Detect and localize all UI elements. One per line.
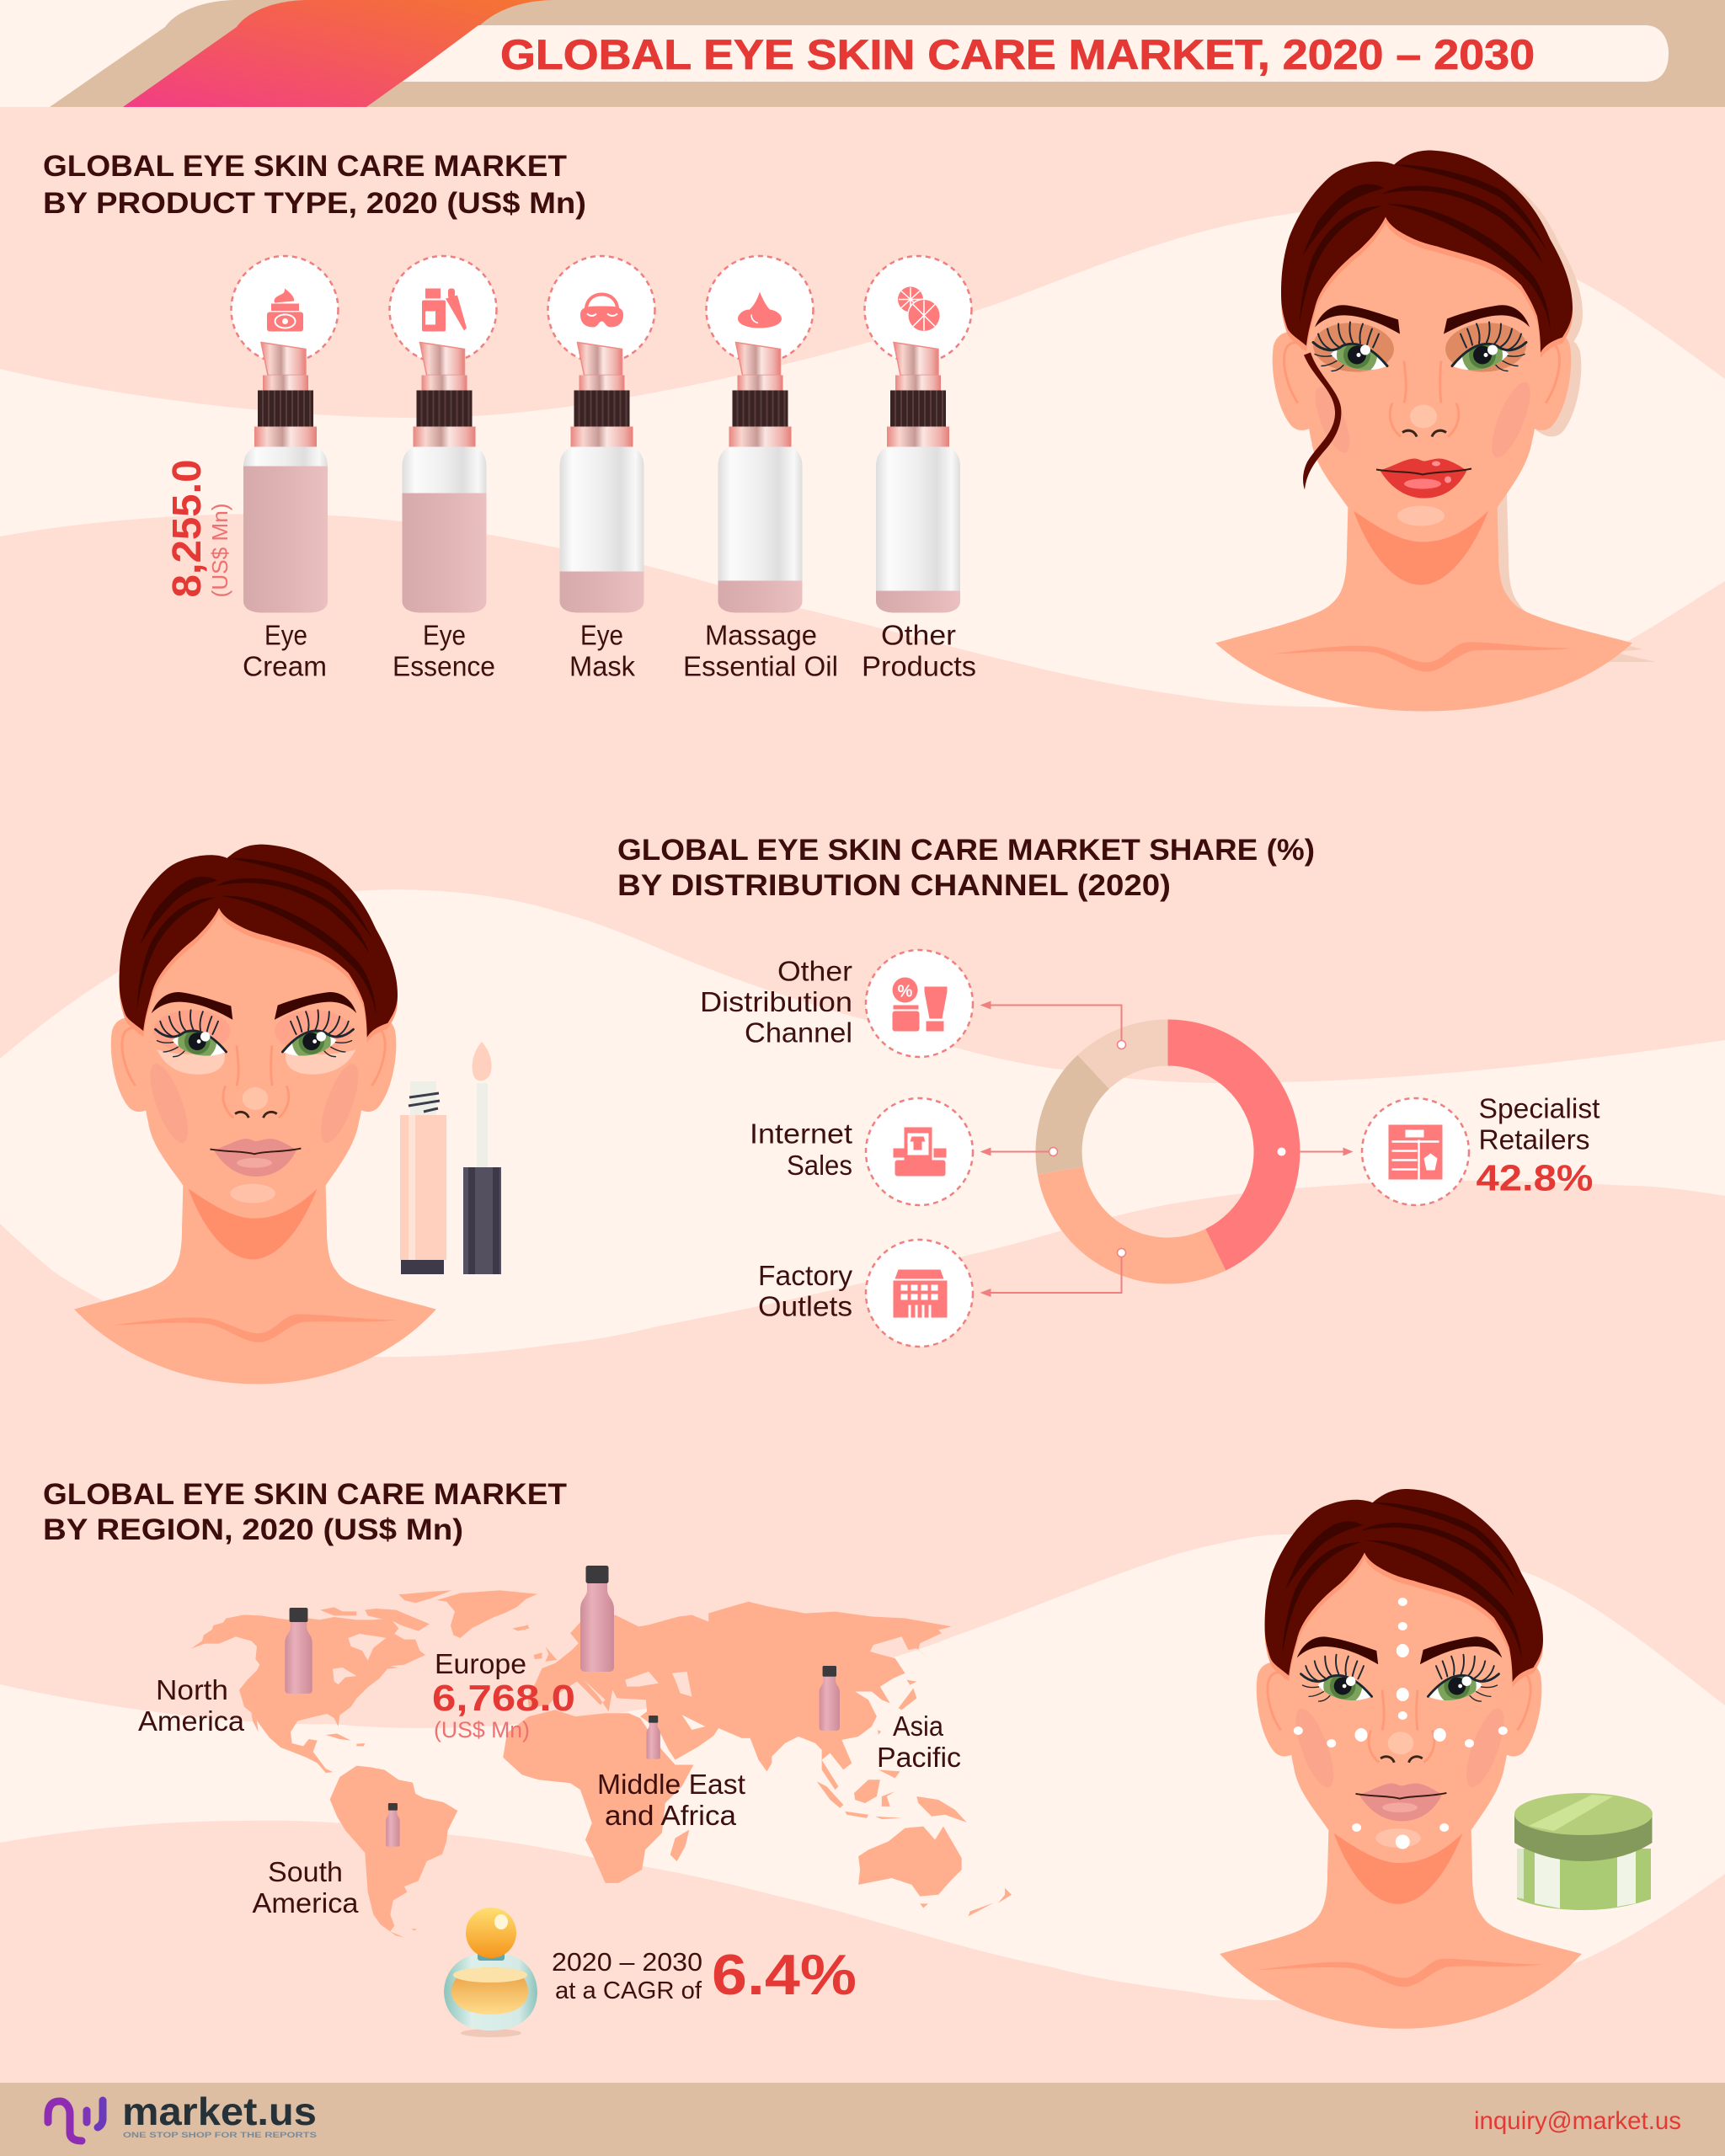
labels: regions	[138, 1648, 961, 1919]
value: eye cream 8,255.0: (US$ Mn)	[207, 504, 232, 598]
labels: product types: Products	[862, 650, 976, 682]
labels: regions: North	[156, 1674, 228, 1705]
value: specialist retailers share: 42.8%	[1476, 1157, 1594, 1199]
logo: market.us	[48, 2089, 317, 2141]
panel: product type bottle chart	[165, 256, 976, 682]
donut: specialist retailers 42.8%	[1167, 1019, 1300, 1271]
contact email: inquiry@market.us	[1474, 2107, 1681, 2135]
leader arrows	[980, 1001, 1353, 1297]
illustration: woman with red lips	[1215, 150, 1656, 711]
illustration: green cream jar	[1514, 1793, 1653, 1910]
labels: regions: 6,768.0	[432, 1678, 575, 1719]
labels: product types: Essential Oil	[683, 650, 838, 682]
bottles on map	[285, 1566, 840, 1847]
heading: by region	[43, 1478, 567, 1546]
labels: regions: America	[253, 1887, 359, 1919]
labels: distribution channels: Other	[777, 955, 852, 987]
icon: massage oil drop	[706, 256, 814, 363]
icon: eye essence	[389, 256, 497, 363]
icon: factory outlets	[866, 1240, 973, 1347]
labels: regions: Asia	[893, 1710, 944, 1742]
labels: regions: Europe	[435, 1648, 526, 1679]
icon: perfume bottle	[444, 1908, 537, 2037]
bottle: middle east and africa	[647, 1716, 660, 1759]
cream dots	[1294, 1598, 1508, 1849]
illustration: woman with under-eye concealer	[74, 845, 436, 1384]
labels: distribution channels	[700, 955, 1600, 1322]
value: eye cream 8,255.0: 8,255.0	[165, 459, 210, 598]
donut: internet sales	[1036, 1055, 1109, 1175]
labels: product types: Mask	[569, 650, 635, 682]
value: eye cream 8,255.0	[165, 460, 232, 598]
labels: regions: (US$ Mn)	[434, 1717, 530, 1742]
heading: by distribution channel: GLOBAL EYE SKIN CARE MARKET SHARE (%)	[617, 834, 1315, 867]
bottle: asia pacific	[820, 1666, 840, 1731]
heading: by product type: GLOBAL EYE SKIN CARE MARKET	[43, 150, 567, 183]
heading: by product type	[43, 150, 586, 220]
donut: other distribution channel	[1077, 1019, 1167, 1089]
bottle: other products	[875, 342, 961, 615]
illustration: woman with cream dots	[1220, 1489, 1582, 2029]
labels: distribution channels: Outlets	[758, 1290, 852, 1322]
labels: product types: Other	[881, 620, 956, 650]
logo wordmark: market.us	[122, 2089, 317, 2133]
labels: distribution channels: Factory	[758, 1260, 852, 1291]
labels: regions: South	[268, 1856, 343, 1887]
heading: by distribution channel: BY DISTRIBUTION CHANNEL (2020)	[617, 869, 1171, 902]
heading: by region: GLOBAL EYE SKIN CARE MARKET	[43, 1478, 567, 1511]
labels: product types: Eye	[580, 620, 623, 650]
icon: other distribution channel: %	[898, 982, 913, 1001]
heading: by distribution channel	[617, 834, 1315, 902]
icon: internet sales	[866, 1098, 973, 1205]
labels: regions: America	[138, 1705, 245, 1737]
illustration: concealer tube and applicator	[400, 1042, 501, 1274]
callout: CAGR 6.4%: 6.4%	[712, 1943, 857, 2007]
labels: distribution channels: Internet	[750, 1118, 852, 1149]
labels: regions: Middle East	[597, 1769, 745, 1800]
labels: regions: and Africa	[605, 1800, 737, 1831]
bottle: eye mask	[559, 342, 645, 615]
bottle: eye cream	[243, 342, 328, 615]
logo mark	[48, 2100, 103, 2141]
bottle: massage essential oil	[718, 342, 804, 615]
bottle: south america	[386, 1803, 400, 1847]
bottle: north america	[285, 1608, 312, 1694]
callout: CAGR 6.4%: at a CAGR of	[555, 1977, 702, 2004]
labels: distribution channels: Channel	[745, 1017, 852, 1048]
icon: specialist retailers	[1362, 1098, 1469, 1205]
bottle: eye essence	[401, 342, 487, 615]
labels: product types: Essence	[393, 650, 495, 682]
world map	[191, 1590, 1012, 1938]
labels: product types: Massage	[705, 620, 817, 650]
labels: product types: Eye	[423, 620, 466, 650]
donut: factory outlets	[1038, 1166, 1226, 1283]
callout: CAGR 6.4%: 2020 – 2030	[552, 1947, 702, 1977]
heading: by region: BY REGION, 2020 (US$ Mn)	[43, 1513, 463, 1546]
labels: distribution channels: Sales	[787, 1150, 852, 1181]
panel: distribution channel donut chart	[700, 950, 1600, 1347]
header band	[0, 0, 1725, 107]
labels: product types: Cream	[243, 650, 327, 682]
labels: distribution channels: Retailers	[1479, 1123, 1590, 1155]
icon: eye cream	[231, 256, 339, 363]
footer band	[0, 2083, 1725, 2156]
bottle: europe	[580, 1566, 614, 1672]
labels: product types	[243, 620, 976, 682]
icon: citrus other products	[864, 256, 972, 363]
labels: product types: Eye	[264, 620, 307, 650]
logo tagline: ONE STOP SHOP FOR THE REPORTS	[123, 2131, 317, 2139]
labels: distribution channels: Distribution	[700, 986, 852, 1017]
heading: by product type: BY PRODUCT TYPE, 2020 (US$ Mn)	[43, 187, 586, 220]
callout: CAGR 6.4%	[552, 1943, 857, 2007]
labels: regions: Pacific	[877, 1742, 961, 1773]
icon: eye mask	[547, 256, 655, 363]
map: europe, asia, africa, oceania	[503, 1602, 1012, 1916]
map: americas and greenland	[191, 1590, 537, 1938]
icon: other distribution channel	[866, 950, 973, 1057]
labels: distribution channels: Specialist	[1479, 1093, 1600, 1123]
title: GLOBAL EYE SKIN CARE MARKET, 2020 – 2030	[500, 31, 1535, 78]
